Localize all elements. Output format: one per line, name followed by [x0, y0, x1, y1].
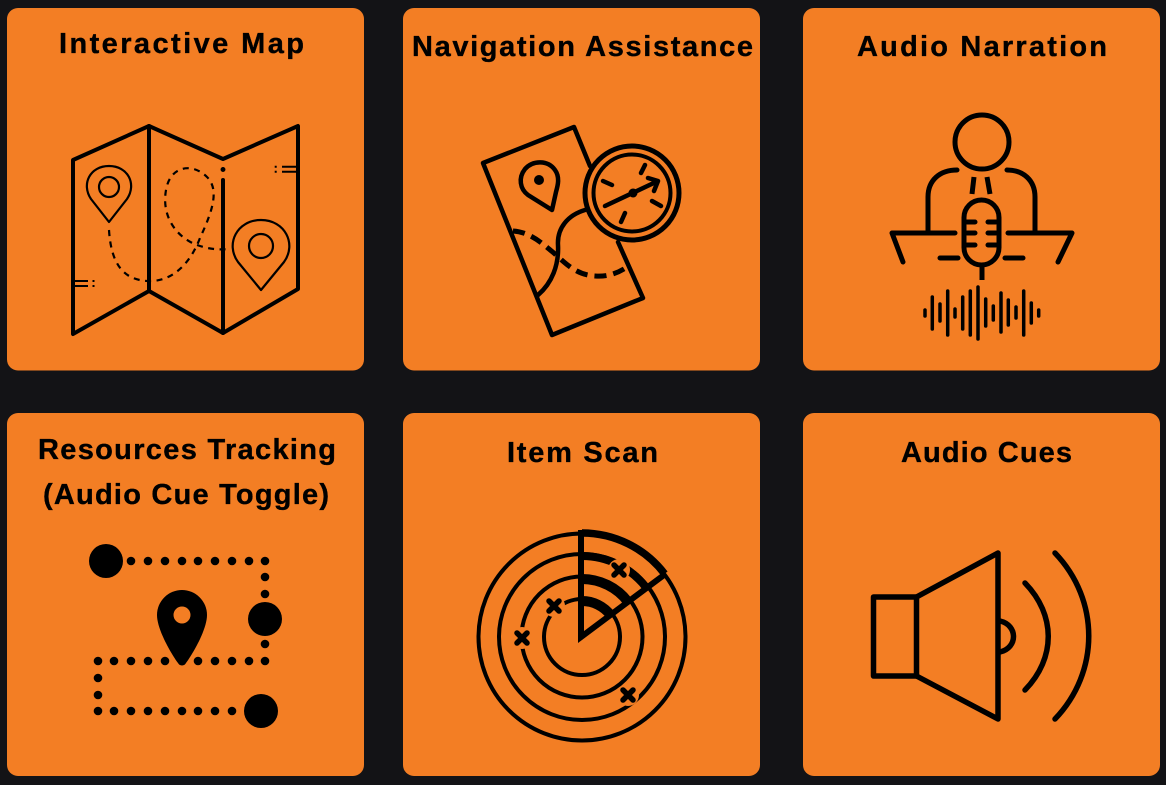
icon: radar [478, 530, 686, 740]
icon: folded map [73, 126, 298, 334]
heading: navigation assistance: Navigation Assistance [412, 31, 753, 63]
heading: resources tracking: Resources Tracking [38, 434, 336, 466]
panel: navigation assistance [403, 8, 760, 370]
waveform [925, 287, 1039, 339]
heading: audio cue toggle: (Audio Cue Toggle) [43, 479, 329, 511]
heading: interactive map: Interactive Map [59, 28, 304, 60]
icon: narrator at microphone [892, 115, 1072, 339]
panel: interactive map [7, 8, 364, 370]
panel: item scan [403, 413, 760, 776]
panel: audio cues [803, 413, 1160, 776]
icon: dotted route with pin [89, 544, 282, 728]
icon: map with compass [483, 127, 679, 335]
panel: resources tracking [7, 413, 364, 776]
icon: speaker [874, 553, 1089, 719]
heading: item scan: Item Scan [507, 437, 658, 469]
heading: audio cues: Audio Cues [901, 437, 1072, 469]
panel: audio narration [803, 8, 1160, 370]
heading: audio narration: Audio Narration [857, 31, 1107, 63]
